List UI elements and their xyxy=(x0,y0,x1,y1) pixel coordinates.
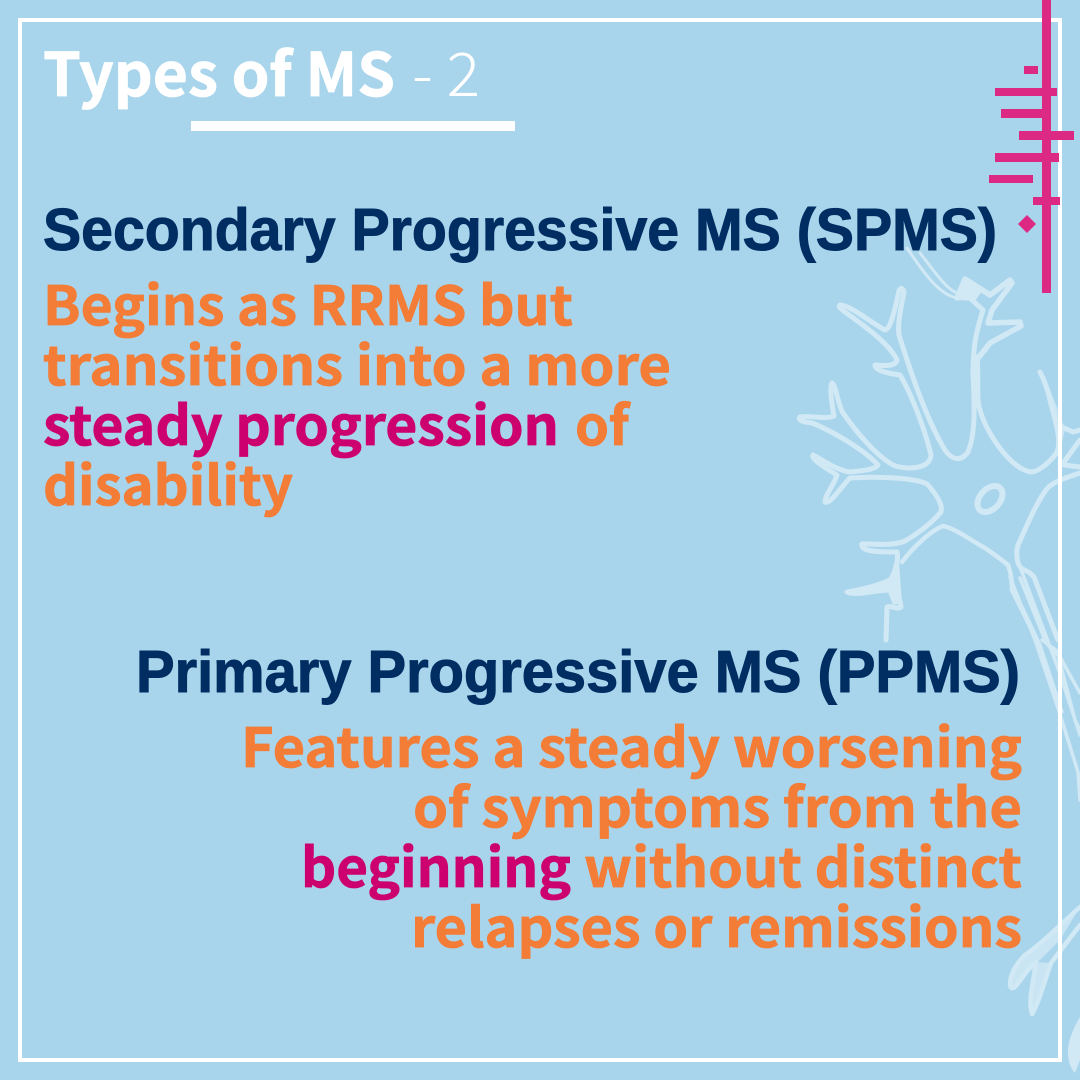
text block: SPMS explanation: of xyxy=(575,382,631,461)
text block: SPMS explanation: Begins as RRMS but xyxy=(43,262,573,341)
text block: PPMS explanation: relapses or remissions xyxy=(411,884,1022,963)
heading: Primary Progressive MS: Primary Progressive MS (PPMS) xyxy=(136,639,1020,705)
text block: PPMS explanation: Features a steady worsening xyxy=(241,704,1022,783)
text block: SPMS explanation: steady progression xyxy=(43,382,559,461)
text block: PPMS explanation xyxy=(241,704,1022,963)
title: Types of MS - 2: Types of MS xyxy=(43,27,395,114)
text block: SPMS explanation: transitions into a more xyxy=(43,322,671,401)
text block: SPMS explanation xyxy=(43,262,671,521)
title: Types of MS - 2: - 2 xyxy=(412,27,480,114)
panel: SPMS description xyxy=(43,197,997,521)
text block: PPMS explanation: of symptoms from the xyxy=(413,764,1022,843)
illustration: neuron outline xyxy=(800,248,1080,1073)
text block: SPMS explanation: disability xyxy=(43,442,293,521)
text block: PPMS explanation: beginning xyxy=(301,824,571,903)
title underline xyxy=(191,121,515,131)
icon: pink spine decoration xyxy=(989,0,1074,293)
heading: Secondary Progressive MS: Secondary Progressive MS (SPMS) xyxy=(43,197,997,263)
panel: PPMS description xyxy=(136,639,1022,963)
text block: PPMS explanation: without distinct xyxy=(584,824,1022,903)
